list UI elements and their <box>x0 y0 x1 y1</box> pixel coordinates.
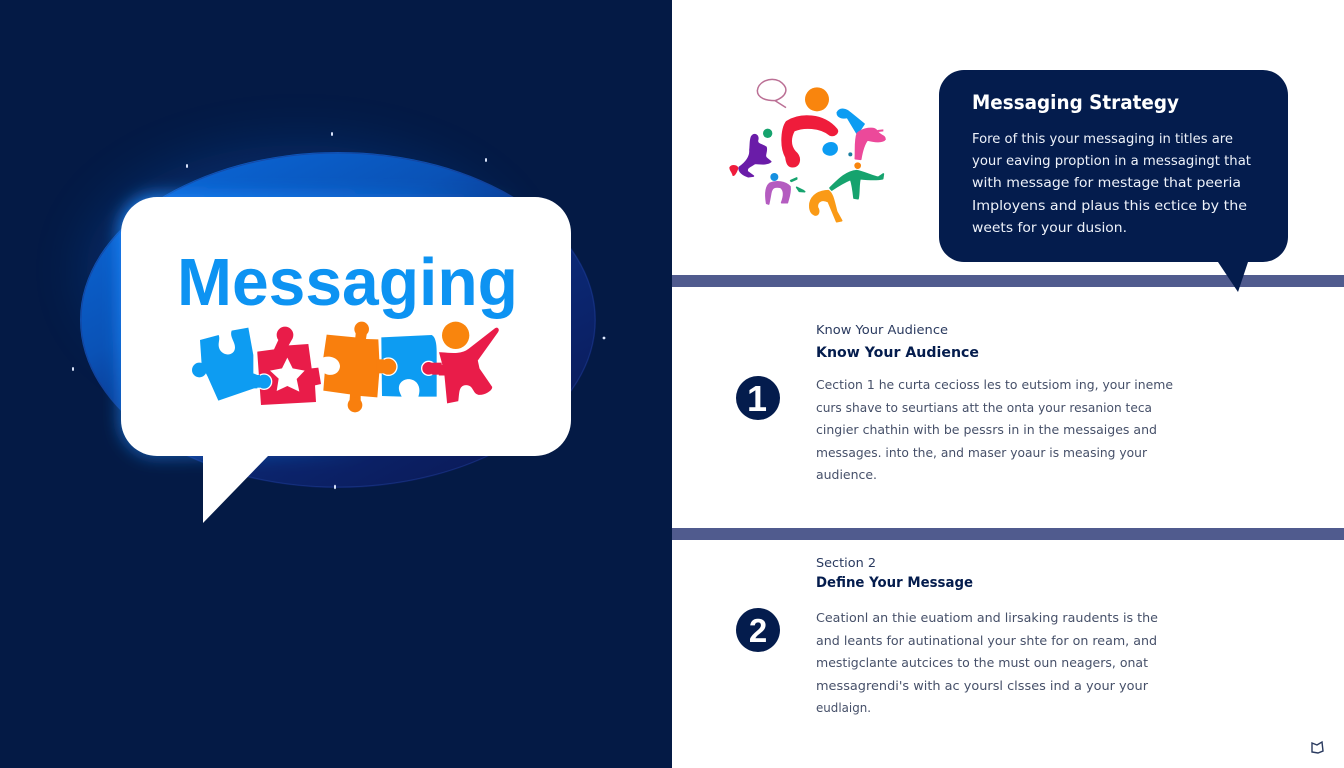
section 1 body: messages. into the, and maser yoaur is measing your <box>816 445 1148 460</box>
callout body: Imployens and plaus this ectice by the <box>972 198 1247 214</box>
decorative stars <box>72 132 605 489</box>
puzzle piece: orange <box>323 322 397 412</box>
blue head <box>770 173 778 181</box>
lilac figure <box>766 182 790 204</box>
green figure <box>830 171 883 199</box>
panel: left navy background <box>0 0 672 768</box>
green dashes <box>791 178 797 181</box>
teal dot <box>848 152 852 156</box>
green dot <box>763 129 772 138</box>
section 2 body: and leants for autinational your shte for on ream, and <box>816 633 1157 648</box>
puzzle piece: blue square <box>381 335 437 397</box>
section 2 body: eudlaign. <box>816 700 871 715</box>
section 2 heading: Define Your Message <box>816 575 973 591</box>
orange figure <box>810 191 842 222</box>
callout body: weets for your dusion. <box>972 220 1127 236</box>
red arc body <box>782 116 837 167</box>
section 2 body <box>816 610 1158 715</box>
section 2 body: mestigclante autcices to the must oun neagers, onat <box>816 655 1148 670</box>
purple figure <box>739 135 771 177</box>
icon: colorful people circle <box>729 79 885 222</box>
star <box>270 358 305 392</box>
puzzle piece: red with star <box>257 327 321 405</box>
callout body: with message for mestage that peeria <box>972 175 1241 191</box>
speech bubble: white <box>121 197 571 523</box>
orange small head <box>854 162 861 169</box>
section 1 heading: Know Your Audience <box>816 345 979 361</box>
panel: right white background <box>672 0 1344 768</box>
callout body: your eaving proption in a messagingt that <box>972 153 1251 169</box>
puzzle piece: blue tilted <box>192 328 272 401</box>
callout body <box>972 131 1251 236</box>
section 1 body: cingier chathin with be pessrs in in the messaiges and <box>816 422 1157 437</box>
red small shape <box>729 165 738 176</box>
number badge 2 <box>736 608 780 652</box>
number badge 2: 2 <box>749 612 767 649</box>
section 1 body: curs shave to seurtians att the onta your resanion teca <box>816 400 1152 415</box>
blue arm <box>837 109 864 134</box>
section 1 body: audience. <box>816 467 877 482</box>
divider bar middle <box>672 528 1344 540</box>
section 1 body <box>816 377 1173 482</box>
section 1 label: Know Your Audience <box>816 322 948 337</box>
section 1 <box>736 322 1173 482</box>
orange head <box>805 87 829 111</box>
section 2 body: messagrendi's with ac yoursl clsses ind a your your <box>816 678 1149 693</box>
pink figure <box>855 128 885 159</box>
number badge 1: 1 <box>747 378 767 419</box>
callout body: Fore of this your messaging in titles are <box>972 131 1233 147</box>
icon: puzzle pieces and figure <box>192 322 499 412</box>
figure body <box>422 327 499 404</box>
divider bar top <box>672 275 1344 287</box>
section 2 label: Section 2 <box>816 555 876 570</box>
number badge 1 <box>736 376 780 420</box>
callout title: Messaging Strategy <box>972 91 1179 114</box>
section 1 body: Cection 1 he curta cecioss les to eutsiom ing, your ineme <box>816 377 1173 392</box>
icon: corner sparkle mark <box>1312 742 1323 753</box>
figure head <box>442 322 469 349</box>
heading: Messaging: Messaging <box>177 245 518 320</box>
blue dot <box>823 143 837 155</box>
small speech bubble outline <box>757 79 786 108</box>
callout: Messaging Strategy <box>939 70 1288 292</box>
glowing blue ellipse <box>80 145 596 488</box>
section 2 body: Ceationl an thie euatiom and lirsaking raudents is the <box>816 610 1158 625</box>
section 2 <box>736 555 1158 715</box>
